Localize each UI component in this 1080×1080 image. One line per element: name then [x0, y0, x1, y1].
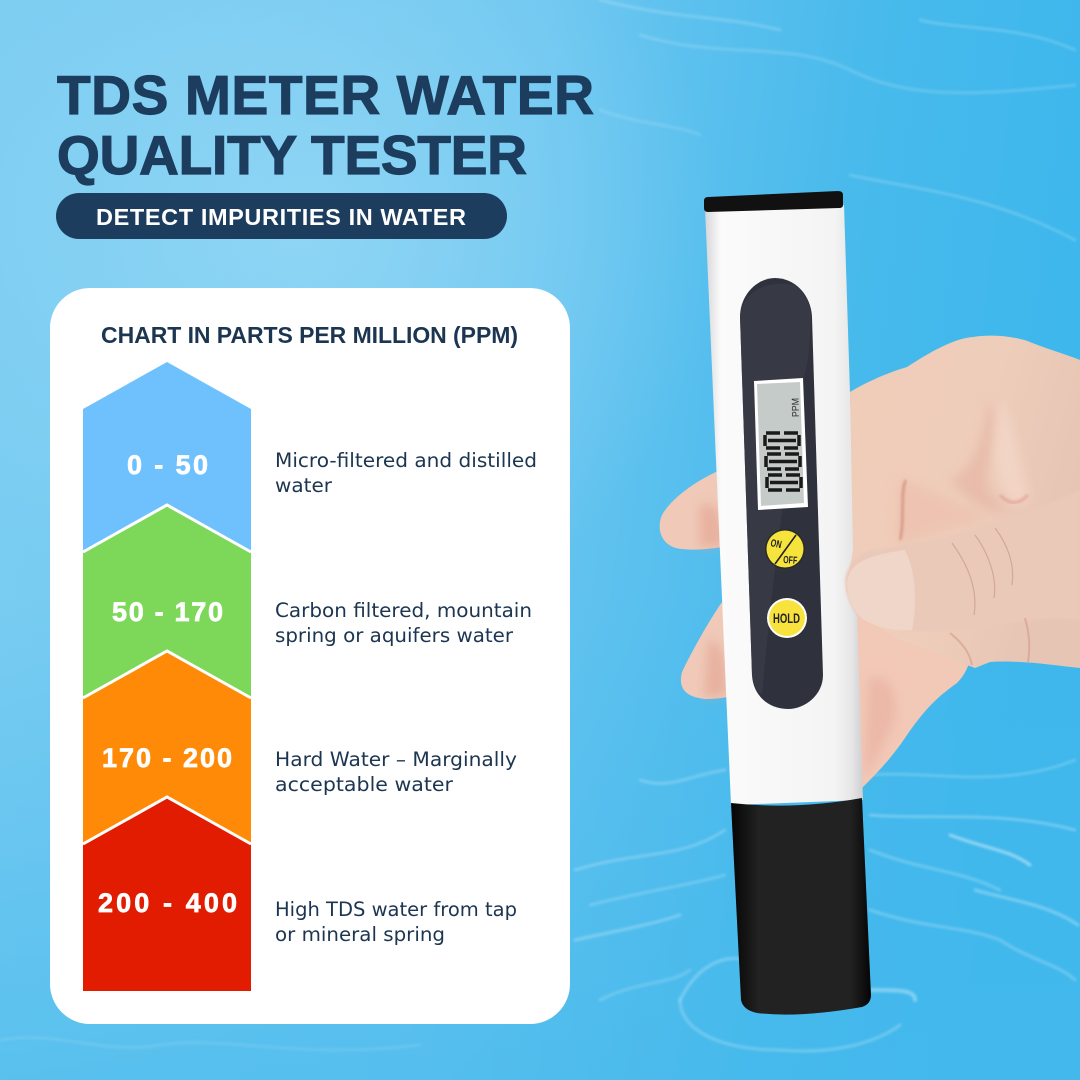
title: TDS METER WATER — [57, 64, 594, 126]
thumb nail — [847, 550, 915, 630]
subtitle pill — [56, 193, 507, 239]
hand: fingers behind meter — [660, 468, 975, 788]
thumb knuckle creases — [952, 528, 1013, 615]
hold button — [767, 598, 807, 638]
description: 170-200: Hard Water – Marginally — [275, 748, 517, 771]
tds meter pen — [704, 191, 871, 1015]
chart heading: CHART IN PARTS PER MILLION (PPM) — [101, 322, 518, 348]
meter probe cap — [731, 798, 871, 1015]
meter top cap — [704, 191, 843, 212]
hand: palm and thumb — [845, 336, 1080, 668]
on/off button — [765, 529, 805, 569]
level: 0-50 — [83, 362, 251, 560]
finger shading — [950, 400, 1012, 512]
level: 50-170 — [83, 505, 251, 706]
description: 50-170: spring or aquifers water — [275, 624, 514, 647]
level: 200-400 — [83, 797, 251, 991]
description: 0-50: Micro-filtered and distilled — [275, 449, 537, 472]
description: 200-400: or mineral spring — [275, 923, 445, 946]
level: 170-200 — [83, 651, 251, 852]
level: 200-400: 200 - 400 — [98, 888, 237, 918]
description: 200-400 — [275, 898, 517, 946]
description: 170-200: acceptable water — [275, 773, 454, 796]
lcd digits — [765, 433, 801, 490]
display panel — [740, 278, 823, 709]
panel: ppm chart — [50, 288, 570, 1024]
level: 0-50: 0 - 50 — [127, 450, 208, 480]
lcd screen — [754, 378, 808, 510]
on/off button: ON — [769, 537, 783, 551]
description: 0-50 — [275, 449, 537, 497]
meter body — [705, 205, 863, 805]
level: 170-200: 170 - 200 — [102, 743, 232, 773]
description: 170-200 — [275, 748, 517, 796]
lower knuckles — [950, 618, 1029, 665]
on/off button: OFF — [783, 554, 798, 567]
ppm label: PPM — [791, 398, 802, 417]
thumb — [845, 490, 1080, 632]
title — [57, 64, 594, 186]
description: 200-400: High TDS water from tap — [275, 898, 517, 921]
subtitle pill: DETECT IMPURITIES IN WATER — [96, 204, 466, 230]
title: QUALITY TESTER — [57, 124, 527, 186]
description: 50-170: Carbon filtered, mountain — [275, 599, 532, 622]
level: 50-170: 50 - 170 — [112, 597, 223, 627]
description: 0-50: water — [275, 474, 333, 497]
hold button: HOLD — [773, 611, 800, 626]
description: 50-170 — [275, 599, 532, 647]
